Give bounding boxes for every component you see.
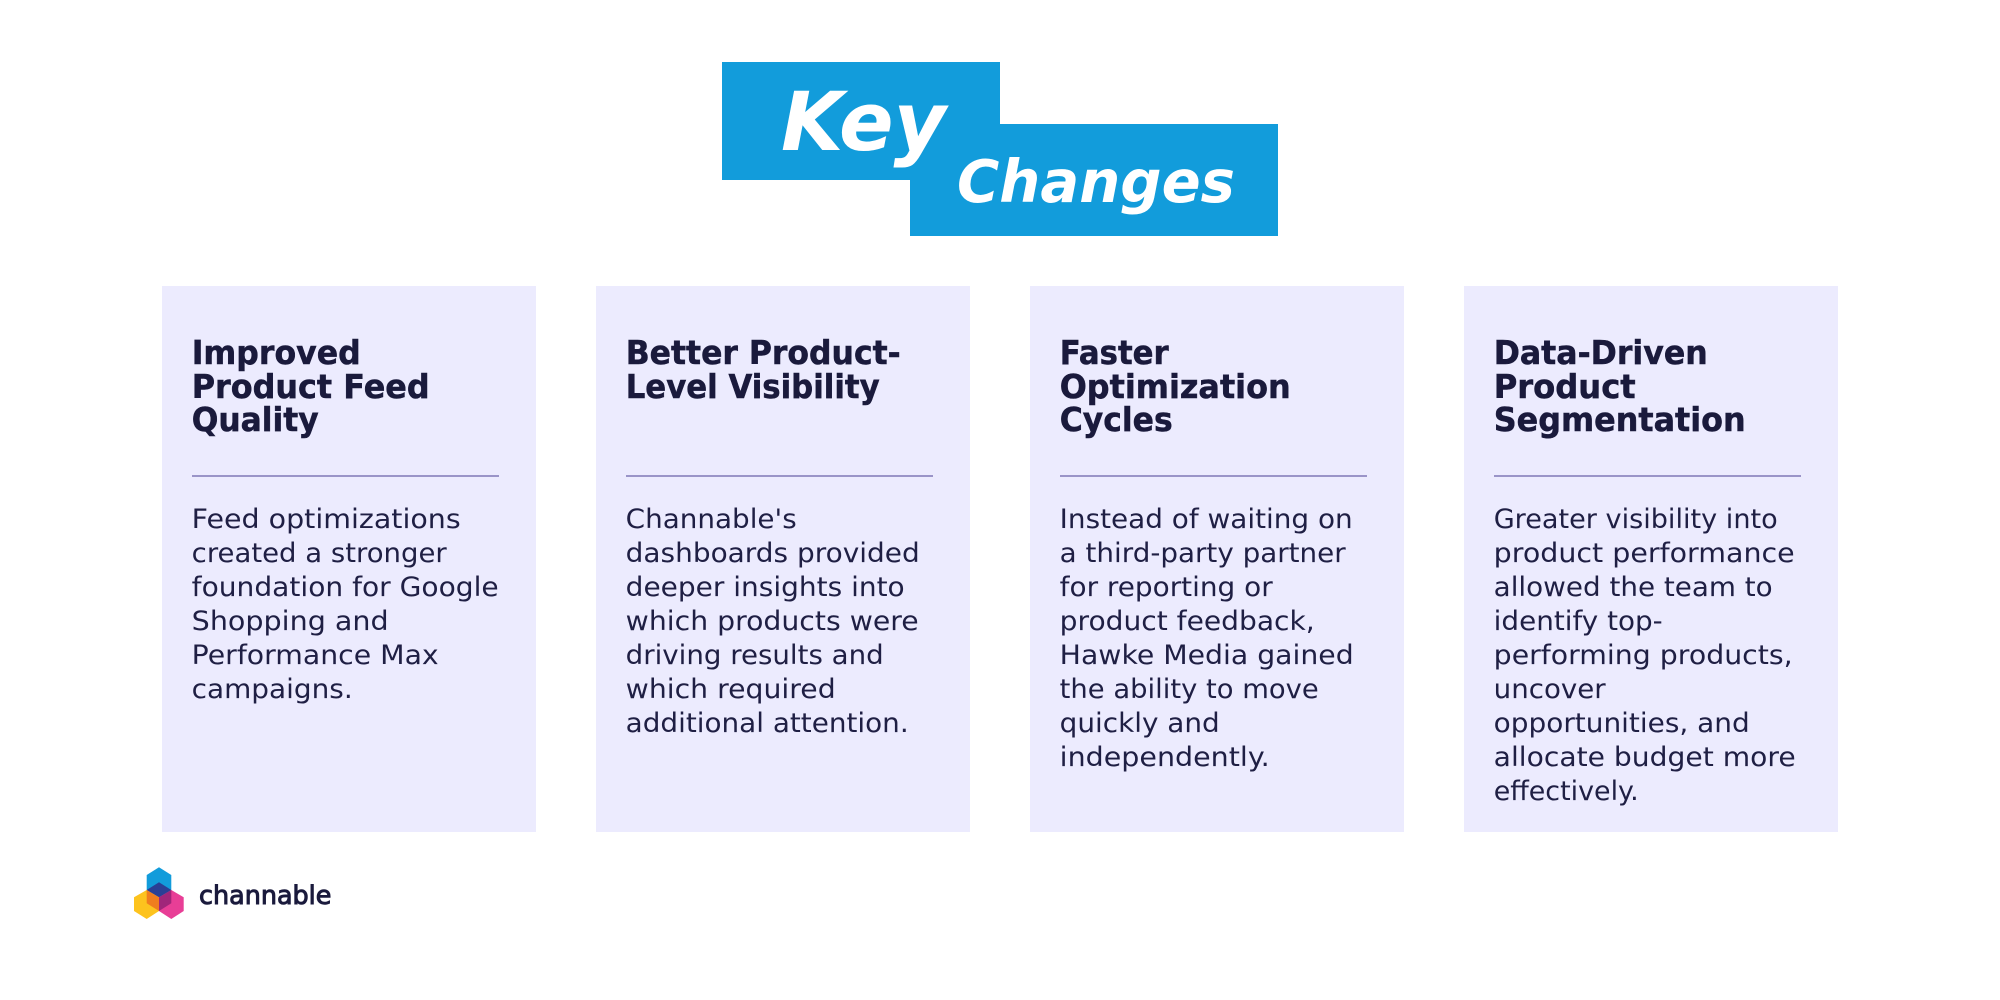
heading [1494, 333, 1746, 439]
heading [1060, 333, 1291, 439]
heading: Optimization [1060, 367, 1291, 406]
heading: Faster [1060, 333, 1169, 372]
body text: Instead of waiting on [1060, 504, 1353, 535]
body text: identify top- [1494, 606, 1663, 637]
body text: effectively. [1494, 776, 1639, 807]
body text: independently. [1060, 742, 1270, 773]
heading: Better Product- [626, 333, 901, 372]
body text: opportunities, and [1494, 708, 1750, 739]
body text: which required [626, 674, 836, 705]
panel: Faster Optimization Cycles [1030, 286, 1404, 832]
body text: allowed the team to [1494, 572, 1773, 603]
panel: Improved Product Feed Quality [162, 286, 536, 832]
body text: which products were [626, 606, 919, 637]
body text: the ability to move [1060, 674, 1319, 705]
heading [626, 333, 901, 406]
body text [626, 504, 920, 739]
body text: deeper insights into [626, 572, 905, 603]
body text [1060, 504, 1354, 773]
body text: allocate budget more [1494, 742, 1796, 773]
body text: Performance Max [192, 640, 439, 671]
body text: uncover [1494, 674, 1607, 705]
body text: additional attention. [626, 708, 909, 739]
heading [192, 333, 430, 439]
heading: Improved [192, 333, 361, 372]
panel: Data-Driven Product Segmentation [1464, 286, 1838, 832]
heading: Data-Driven [1494, 333, 1708, 372]
body text [1494, 504, 1796, 807]
panel: Better Product-Level Visibility [596, 286, 970, 832]
body text: Greater visibility into [1494, 504, 1778, 535]
body text: campaigns. [192, 674, 353, 705]
body text [192, 504, 499, 705]
body text: foundation for Google [192, 572, 499, 603]
logo: channable: channable [199, 881, 331, 911]
title: Key Changes [722, 62, 1278, 236]
heading: Level Visibility [626, 367, 880, 406]
body text: for reporting or [1060, 572, 1274, 603]
body text: Feed optimizations [192, 504, 461, 535]
body text: quickly and [1060, 708, 1220, 739]
body text: Hawke Media gained [1060, 640, 1354, 671]
heading: Cycles [1060, 400, 1173, 439]
body text: driving results and [626, 640, 884, 671]
heading: Product [1494, 367, 1636, 406]
heading: Segmentation [1494, 400, 1746, 439]
title: Key Changes: Key [781, 76, 949, 170]
body text: performing products, [1494, 640, 1793, 671]
body text: a third-party partner [1060, 538, 1347, 569]
body text: dashboards provided [626, 538, 920, 569]
body text: product performance [1494, 538, 1795, 569]
body text: created a stronger [192, 538, 448, 569]
logo: channable [134, 867, 331, 919]
body text: Channable's [626, 504, 797, 535]
heading: Quality [192, 400, 319, 439]
body text: Shopping and [192, 606, 389, 637]
body text: product feedback, [1060, 606, 1315, 637]
title: Key Changes: Changes [957, 147, 1235, 216]
heading: Product Feed [192, 367, 430, 406]
